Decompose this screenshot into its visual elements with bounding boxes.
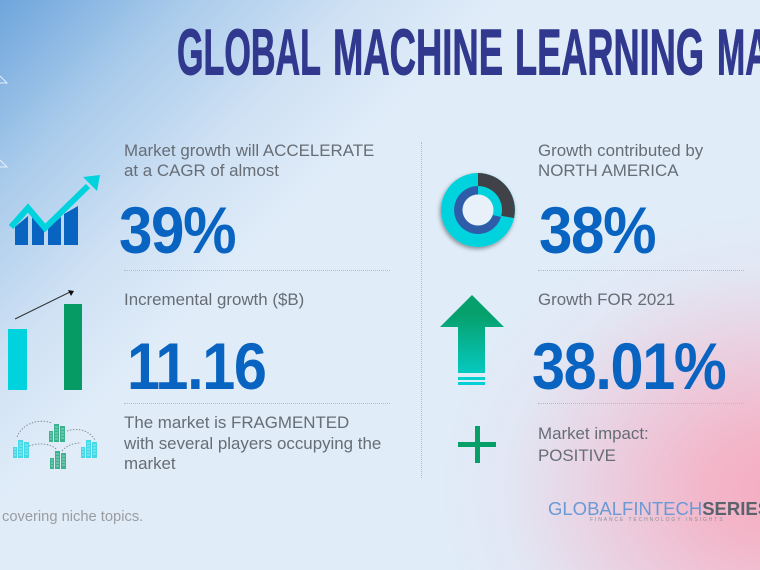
text: north america: NORTH AMERICA <box>538 161 678 180</box>
icon: donut chart <box>437 172 517 252</box>
text: incremental growth: Incremental growth ($B) <box>124 290 304 309</box>
icon: fragmented market buildings <box>13 420 97 469</box>
text: north america: Growth contributed by <box>538 141 703 160</box>
decorative triangles <box>0 76 8 168</box>
footer text: covering niche topics. <box>2 509 143 525</box>
number: 38%: 38% <box>539 193 655 267</box>
title: GLOBAL <box>177 16 321 88</box>
icon: up arrow <box>440 295 504 385</box>
text: market impact <box>538 424 649 465</box>
number: 39%: 39% <box>119 193 235 267</box>
logo tagline: FINANCE TECHNOLOGY INSIGHTS <box>590 517 724 523</box>
text: fragmented: The market is FRAGMENTED <box>124 413 349 432</box>
logo <box>548 498 760 523</box>
text: market impact: Market impact: <box>538 424 649 443</box>
title: MACHINE <box>333 16 503 88</box>
number: 11.16: 11.16 <box>127 329 266 403</box>
icon: growth chart with arrow <box>8 175 100 245</box>
icon: plus <box>458 426 496 463</box>
number: 38.01%: 38.01% <box>532 329 725 403</box>
text: fragmented: market <box>124 454 176 473</box>
text: north america <box>538 141 704 180</box>
title <box>177 16 760 88</box>
text: fragmented: with several players occupying the <box>124 434 381 452</box>
text: market impact: POSITIVE <box>538 446 616 465</box>
icon: bars with arrow <box>8 290 82 390</box>
text: fragmented <box>124 413 381 473</box>
text: market growth: at a CAGR of almost <box>124 161 279 180</box>
text: market growth: Market growth will ACCELERATE <box>124 141 374 160</box>
text: growth for 2021: Growth FOR 2021 <box>538 290 675 309</box>
text: market growth <box>124 141 374 180</box>
